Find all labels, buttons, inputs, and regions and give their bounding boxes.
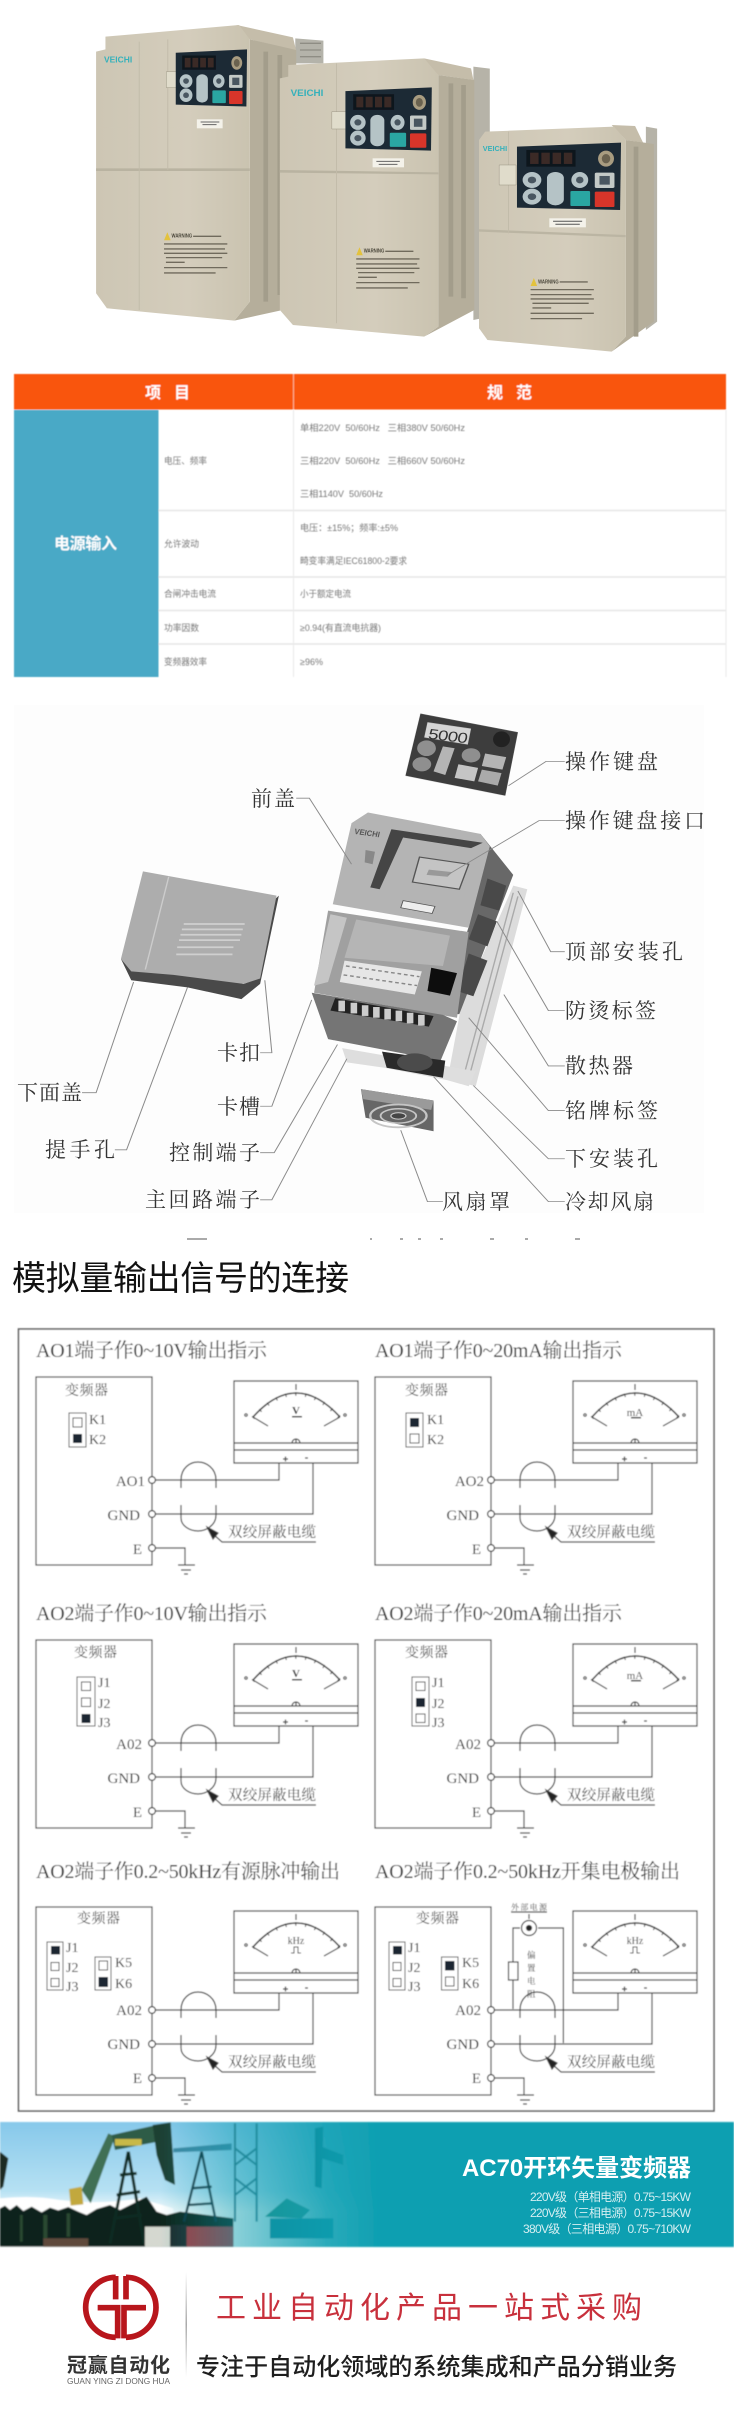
panel text labels: GND bbox=[446, 1508, 479, 1524]
panel text labels: A02 bbox=[455, 1737, 481, 1753]
panel text labels bbox=[405, 1644, 656, 1821]
panel text labels: 变频器 bbox=[74, 1644, 117, 1661]
inverter small: VEICHI bbox=[483, 144, 507, 153]
panel text labels: E bbox=[472, 1542, 481, 1558]
switches J and K: K5 bbox=[115, 1956, 132, 1971]
switches J and K: J1 bbox=[66, 1941, 78, 1956]
panel: AO2 open collector output bbox=[375, 1860, 697, 2104]
panel: AO2 0-20mA: AO2端子作0~20mA输出指示 bbox=[375, 1602, 623, 1625]
switches J and K: J3 bbox=[408, 1980, 420, 1995]
logo wordmark bbox=[67, 2354, 171, 2386]
table rows: 合闸冲击电流 bbox=[164, 588, 216, 599]
callout labels: 铭牌标签 bbox=[565, 1095, 658, 1125]
panel text labels: 双绞屏蔽电缆 bbox=[567, 1786, 656, 1804]
panel text labels: GND bbox=[108, 1508, 140, 1524]
panel: AO1 0-10V: AO1端子作0~10V输出指示 bbox=[36, 1339, 268, 1362]
panel text labels: E bbox=[133, 1805, 142, 1821]
product photo: three inverters bbox=[96, 25, 657, 352]
inverter small bbox=[479, 125, 657, 352]
table header bar: 规 范 bbox=[487, 384, 532, 402]
main inverter body: VEICHI bbox=[353, 827, 381, 839]
panel text labels: GND bbox=[446, 1771, 479, 1787]
external supply and bias resistor: 阻 bbox=[527, 1989, 536, 1999]
leader lines bbox=[82, 761, 565, 1202]
table rows: 单相220V 50/60Hz 三相380V 50/60Hz bbox=[300, 422, 466, 433]
inverter large: WARNING bbox=[172, 234, 192, 239]
panel text labels bbox=[405, 1382, 656, 1558]
external supply and bias resistor bbox=[508, 1902, 563, 2043]
panel text labels: V bbox=[292, 1405, 300, 1417]
panel text labels: 双绞屏蔽电缆 bbox=[567, 2053, 656, 2071]
banner specs: 220V级（三相电源）0.75~15KW bbox=[530, 2206, 692, 2220]
callout labels: 主回路端子 bbox=[145, 1184, 260, 1214]
switches J and K: K6 bbox=[115, 1977, 132, 1992]
callout labels: 操作键盘接口 bbox=[565, 805, 705, 835]
panel text labels bbox=[74, 1644, 316, 1821]
callout labels: 卡扣 bbox=[217, 1037, 260, 1067]
table rows: 三相220V 50/60Hz 三相660V 50/60Hz bbox=[300, 455, 466, 466]
blue category cell: 电源输入 bbox=[54, 534, 117, 553]
panel text labels: kHz bbox=[288, 1936, 305, 1947]
exploded view drawing bbox=[82, 714, 565, 1202]
switches J and K: J1 bbox=[408, 1941, 420, 1956]
banner specs: 220V级（单相电源）0.75~15KW bbox=[530, 2190, 692, 2204]
table rows bbox=[158, 410, 726, 677]
callout labels bbox=[17, 746, 705, 1216]
banner: AC70 product bbox=[0, 2122, 734, 2247]
exploded view diagram bbox=[14, 705, 705, 1216]
table header bar bbox=[14, 374, 726, 410]
panel text labels: V bbox=[292, 1668, 300, 1680]
panel text labels: E bbox=[472, 1805, 481, 1821]
heading: analog output connection: 模拟量输出信号的连接 bbox=[12, 1260, 349, 1298]
panel: AO2 0-20mA bbox=[375, 1602, 697, 1837]
inverter box, meter and cable bbox=[375, 1640, 697, 1837]
panel text labels: E bbox=[133, 1542, 142, 1558]
operating keypad: 5000 bbox=[427, 726, 469, 747]
panel text labels bbox=[65, 1382, 316, 1558]
switch K1 K2 bbox=[406, 1413, 444, 1448]
panel text labels: AO2 bbox=[455, 1474, 484, 1490]
panel: AO1 0-20mA bbox=[375, 1339, 697, 1574]
inverter box, meter and cable bbox=[36, 1640, 358, 1837]
switches J and K bbox=[47, 1941, 132, 1995]
switch J1 J2 J3 bbox=[412, 1676, 444, 1731]
inverter medium: VEICHI bbox=[291, 89, 323, 98]
panel: AO2 pulse output: AO2端子作0.2~50kHz有源脉冲输出 bbox=[36, 1860, 340, 1883]
panel text labels: 变频器 bbox=[405, 1382, 448, 1399]
table rows: ≥96% bbox=[300, 657, 323, 667]
switches J and K: J2 bbox=[408, 1961, 420, 1976]
inverter medium bbox=[280, 58, 490, 337]
switch J1 J2 J3: J3 bbox=[432, 1716, 444, 1731]
table rows: 功率因数 bbox=[164, 622, 199, 633]
inverter box, meter and cable bbox=[36, 1907, 358, 2104]
table rows: 电压：±15%；频率:±5% bbox=[300, 522, 398, 533]
panel: AO2 0-10V bbox=[36, 1602, 358, 1837]
main inverter body bbox=[312, 812, 527, 1086]
panel text labels bbox=[416, 1910, 656, 2087]
logo wordmark: GUAN YING ZI DONG HUA bbox=[67, 2377, 171, 2386]
switch J1 J2 J3: J3 bbox=[98, 1716, 110, 1731]
callout labels: 下安装孔 bbox=[565, 1143, 658, 1173]
panel: AO1 0-10V bbox=[36, 1339, 358, 1574]
slogan: 工业自动化产品一站式采购 bbox=[216, 2292, 642, 2325]
banner specs bbox=[523, 2190, 692, 2236]
panel text labels: 变频器 bbox=[416, 1910, 459, 1927]
external supply and bias resistor: 偏 bbox=[527, 1950, 536, 1960]
switch K1 K2 bbox=[69, 1413, 106, 1448]
switch K1 K2: K2 bbox=[89, 1433, 106, 1448]
panel text labels: 变频器 bbox=[405, 1644, 448, 1661]
panel text labels: 双绞屏蔽电缆 bbox=[228, 1786, 316, 1804]
panel text labels: 双绞屏蔽电缆 bbox=[228, 1523, 316, 1541]
panel: AO2 open collector output: AO2端子作0.2~50kHz开集电极输出 bbox=[375, 1860, 680, 1883]
cropped caption remnants bbox=[187, 1238, 580, 1240]
switch J1 J2 J3: J2 bbox=[98, 1697, 110, 1712]
inverter large: VEICHI bbox=[104, 56, 132, 65]
panel text labels: A02 bbox=[116, 1737, 142, 1753]
switches J and K: K5 bbox=[462, 1956, 479, 1971]
inverter box, meter and cable bbox=[375, 1907, 697, 2104]
callout labels: 前盖 bbox=[251, 783, 295, 813]
callout labels: 风扇罩 bbox=[442, 1186, 510, 1216]
specification table bbox=[14, 374, 726, 677]
switch K1 K2: K2 bbox=[427, 1433, 444, 1448]
panel text labels: GND bbox=[108, 1771, 140, 1787]
panel text labels: mA bbox=[627, 1407, 643, 1419]
external supply and bias resistor: 电 bbox=[527, 1976, 536, 1986]
panel text labels: GND bbox=[108, 2037, 140, 2053]
panel: AO1 0-20mA: AO1端子作0~20mA输出指示 bbox=[375, 1339, 623, 1362]
table rows: 三相1140V 50/60Hz bbox=[300, 488, 383, 499]
callout labels: 冷却风扇 bbox=[565, 1186, 654, 1216]
table header bar: 项 目 bbox=[145, 385, 190, 402]
banner title: AC70开环矢量变频器 bbox=[462, 2154, 691, 2182]
table rows: 电压、频率 bbox=[164, 455, 207, 466]
lower cover bbox=[121, 871, 279, 999]
panel: AO2 pulse output bbox=[36, 1860, 358, 2104]
blue category cell bbox=[14, 410, 158, 677]
switch J1 J2 J3: J1 bbox=[432, 1676, 444, 1691]
table rows: 小于额定电流 bbox=[300, 588, 351, 599]
banner photo bbox=[0, 2122, 734, 2247]
panel text labels: 双绞屏蔽电缆 bbox=[228, 2053, 316, 2071]
callout labels: 控制端子 bbox=[169, 1137, 260, 1167]
table rows: 变频器效率 bbox=[164, 656, 207, 667]
callout labels: 防烫标签 bbox=[565, 995, 656, 1025]
external supply and bias resistor: 外部电源 bbox=[511, 1902, 548, 1912]
panel: AO2 0-10V: AO2端子作0~10V输出指示 bbox=[36, 1602, 268, 1625]
switch J1 J2 J3: J2 bbox=[432, 1697, 444, 1712]
panel text labels: 变频器 bbox=[65, 1382, 108, 1399]
inverter box, meter and cable bbox=[36, 1377, 358, 1574]
switches J and K bbox=[389, 1941, 479, 1995]
callout labels: 下面盖 bbox=[17, 1077, 82, 1107]
callout labels: 顶部安装孔 bbox=[565, 936, 683, 966]
panel text labels: 双绞屏蔽电缆 bbox=[567, 1523, 656, 1541]
table rows: 允许波动 bbox=[164, 538, 199, 549]
panel text labels: A02 bbox=[455, 2003, 481, 2019]
switches J and K: K6 bbox=[462, 1977, 479, 1992]
switches J and K: J2 bbox=[66, 1961, 78, 1976]
inverter medium: WARNING bbox=[364, 249, 385, 254]
switch K1 K2: K1 bbox=[89, 1413, 106, 1428]
fan cover bbox=[361, 1089, 434, 1131]
inverter box, meter and cable bbox=[375, 1377, 697, 1574]
callout labels: 卡槽 bbox=[217, 1091, 260, 1121]
callout labels: 提手孔 bbox=[45, 1134, 115, 1164]
logo wordmark: 冠赢自动化 bbox=[67, 2354, 170, 2377]
switch J1 J2 J3: J1 bbox=[98, 1676, 110, 1691]
panel text labels: GND bbox=[446, 2037, 479, 2053]
switch J1 J2 J3 bbox=[77, 1676, 110, 1731]
callout labels: 散热器 bbox=[565, 1050, 633, 1080]
panel text labels bbox=[77, 1910, 316, 2087]
panel text labels: AO1 bbox=[116, 1474, 145, 1490]
operating keypad bbox=[405, 714, 518, 796]
table rows: 畸变率满足IEC61800-2要求 bbox=[300, 555, 407, 566]
panel text labels: 变频器 bbox=[77, 1910, 120, 1927]
logo mark bbox=[86, 2276, 156, 2338]
wiring diagram frame bbox=[18, 1329, 714, 2111]
switch K1 K2: K1 bbox=[427, 1413, 444, 1428]
panel text labels: E bbox=[472, 2071, 481, 2087]
table rows: ≥0.94(有直流电抗器) bbox=[300, 622, 381, 633]
banner specs: 380V级（三相电源）0.75~710KW bbox=[523, 2222, 692, 2236]
panel text labels: E bbox=[133, 2071, 142, 2087]
tagline: 专注于自动化领域的系统集成和产品分销业务 bbox=[196, 2354, 677, 2381]
panel text labels: mA bbox=[627, 1670, 643, 1682]
panel text labels: A02 bbox=[116, 2003, 142, 2019]
callout labels: 操作键盘 bbox=[565, 746, 658, 776]
external supply and bias resistor: 置 bbox=[527, 1963, 536, 1973]
inverter large bbox=[96, 25, 323, 321]
switches J and K: J3 bbox=[66, 1980, 78, 1995]
panel text labels: kHz bbox=[627, 1936, 644, 1947]
inverter small: WARNING bbox=[538, 279, 559, 285]
footer bbox=[67, 2272, 677, 2386]
